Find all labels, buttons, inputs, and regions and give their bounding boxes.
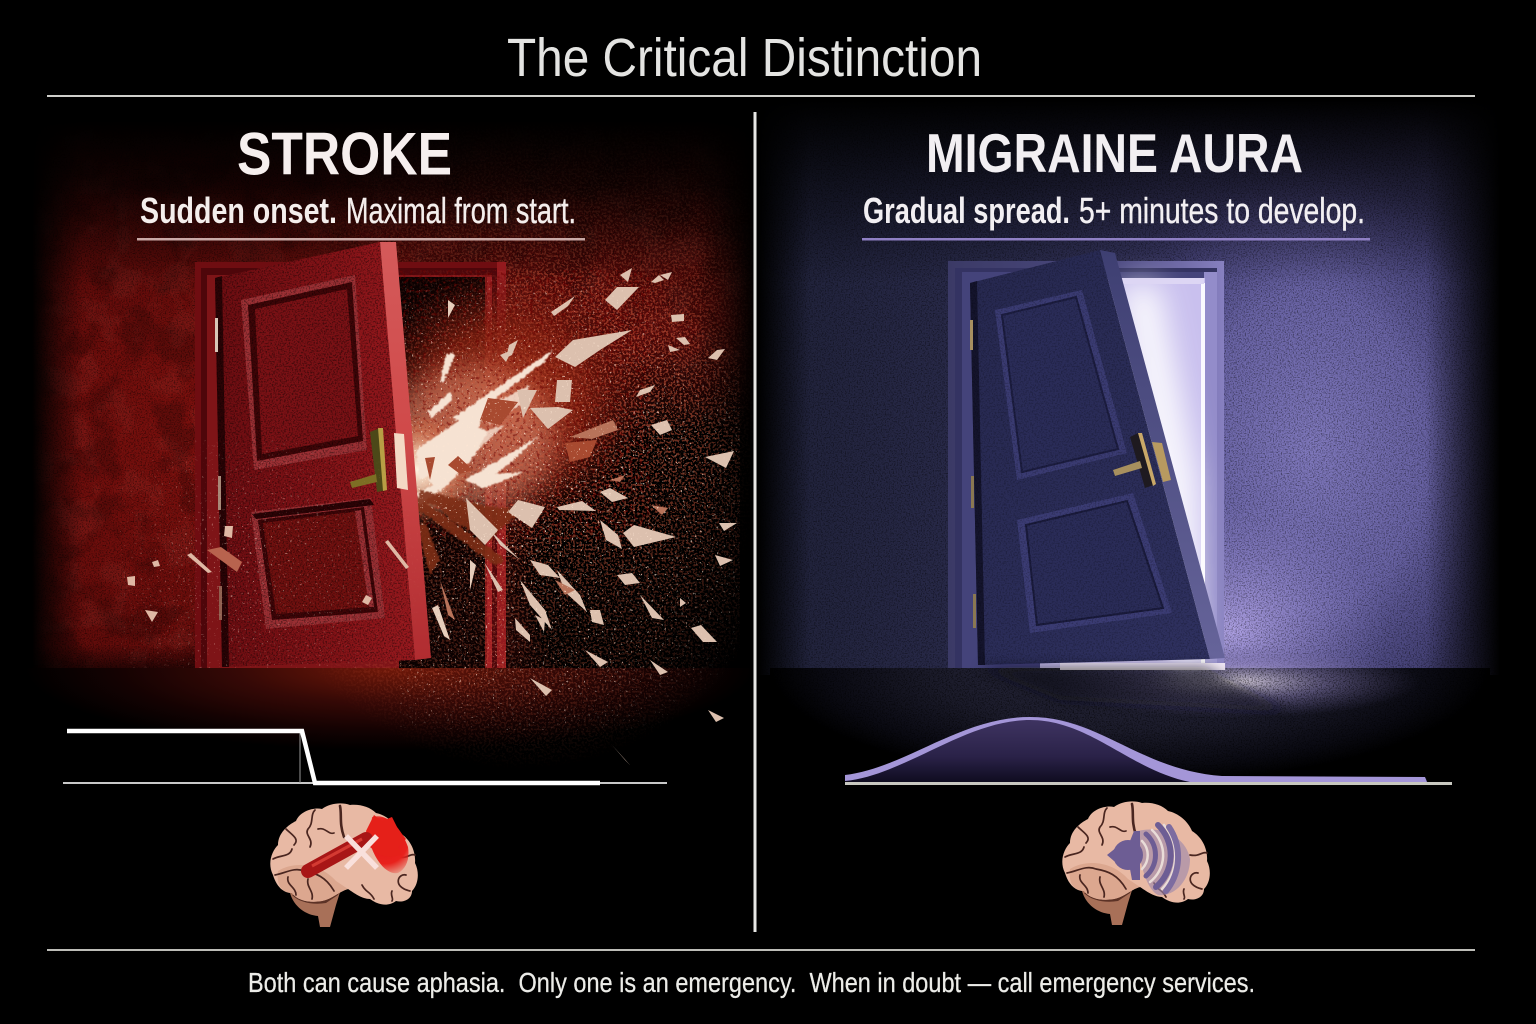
door cast shadow [978,667,1290,712]
footer message: Both can cause aphasia. Only one is an emergency. When in doubt — call emergency services. [248,967,1255,998]
subheading: stroke: Sudden onset. [140,190,337,231]
top rule [47,95,1475,97]
chart: stroke sudden drop [63,731,667,784]
door hardware [215,318,408,620]
subheading part: migraine: 5+ minutes to develop. [1079,190,1365,231]
title: The Critical Distinction [507,28,982,88]
red door [120,242,440,668]
icon: brain with blocked artery [270,803,418,927]
subheading: migraine: Gradual spread. [863,190,1070,231]
violet wall [766,114,1495,675]
floor [25,668,755,833]
heading: stroke: STROKE [237,120,452,188]
red wall [36,140,751,668]
subheading part: stroke: Maximal from start. [346,190,576,231]
door panel: lower [251,498,385,629]
explosion burst [363,350,553,575]
door frame [195,262,506,668]
debris cloud [340,270,740,757]
heading: migraine aura: MIGRAINE AURA [926,122,1303,184]
floor [770,646,1490,908]
door debris [127,526,409,622]
indigo door [970,250,1225,665]
panel: migraine aura scene [766,114,1495,772]
floor light under door [1060,663,1225,670]
bottom rule [47,949,1475,951]
centre divider [754,112,756,932]
door texture [215,242,415,667]
underline: migraine [862,238,1370,240]
door panel: upper [241,275,367,470]
underline: stroke [137,238,585,240]
door debris: brick [207,547,242,572]
icon: brain with spreading waves [1062,801,1210,925]
chart: migraine gradual curve [845,717,1452,785]
door frame [948,261,1224,668]
debris shards [400,268,740,765]
